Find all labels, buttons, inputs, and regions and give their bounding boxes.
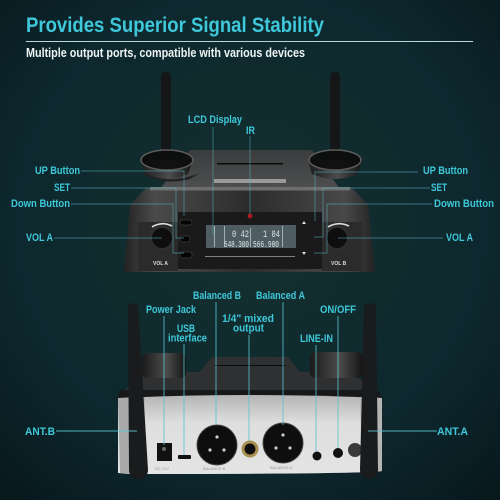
label: VOL A right: VOL A: [446, 232, 473, 244]
icon: right antenna: [330, 72, 340, 156]
device top: [118, 357, 382, 396]
USB port: [178, 455, 191, 459]
label: ANT.A: ANT.A: [437, 426, 468, 438]
LCD display: 0 42: [232, 230, 249, 241]
label: SET left: SET: [54, 182, 70, 194]
label: ANT.B: ANT.B: [25, 426, 55, 438]
label: Balanced B: Balanced B: [193, 290, 241, 302]
XLR connector A: [263, 423, 303, 463]
callout lines: top device: [54, 127, 443, 253]
left antenna: [128, 303, 148, 480]
top device: receiver front: [124, 72, 375, 272]
on/off switch: [333, 448, 343, 458]
power jack: [157, 443, 172, 461]
label: USB interface: [168, 323, 207, 344]
label: ON/OFF: ON/OFF: [320, 304, 356, 316]
label: Power Jack: Power Jack: [146, 304, 197, 316]
subtitle: Multiple output ports, compatible with various devices: [26, 46, 305, 60]
right knob panel: [322, 222, 362, 271]
callout lines: bottom device: [56, 302, 437, 455]
right button marks: [302, 221, 306, 255]
label: LINE-IN: LINE-IN: [300, 333, 333, 345]
port caption text: [155, 465, 293, 471]
front panel: [178, 212, 322, 269]
left cup: [142, 353, 186, 378]
side connector right: [348, 443, 362, 457]
label: IR: IR: [246, 125, 255, 137]
line-in port: [312, 452, 322, 460]
label: UP Button left: UP Button: [35, 165, 80, 177]
IR sensor: [248, 214, 252, 218]
port caption text: BALANCE B: [203, 466, 226, 471]
label: USB interface: interface: [168, 332, 207, 344]
label: 1/4 inch mixed output: 1/4" mixed: [222, 313, 274, 325]
label: UP Button right: UP Button: [423, 165, 468, 177]
left knob panel: VOL A: [153, 261, 168, 267]
LCD display: 566.900: [253, 240, 279, 250]
label: 1/4 inch mixed output: [222, 313, 274, 334]
right cup: [310, 352, 363, 378]
label: VOL A left: VOL A: [26, 232, 53, 244]
label: Balanced A: Balanced A: [256, 290, 305, 302]
LCD display: [206, 225, 296, 250]
left knob panel: [138, 222, 178, 271]
right antenna: [360, 303, 378, 479]
XLR connector B: [197, 425, 237, 465]
device body: [124, 188, 375, 272]
label: Down Button left: Down Button: [11, 198, 70, 210]
rear silver panel: [118, 395, 382, 474]
bottom device: receiver rear: [118, 303, 383, 480]
right knob panel: VOL B: [331, 261, 347, 267]
icon: left antenna: [161, 72, 171, 156]
label: SET right: SET: [431, 182, 447, 194]
LCD display: 548.300: [224, 240, 249, 250]
left buttons: [180, 220, 192, 258]
LCD display: 1 04: [263, 230, 280, 241]
port caption text: DC 12V: [155, 466, 169, 471]
port caption text: BALANCE A: [270, 465, 293, 470]
label: 1/4 inch mixed output: output: [233, 322, 264, 334]
label: LCD Display: LCD Display: [188, 114, 243, 126]
right cup: [308, 150, 362, 179]
left cup: [140, 150, 200, 182]
device top panel: [160, 150, 340, 189]
label: USB interface: USB: [177, 323, 195, 335]
title: Provides Superior Signal Stability: [26, 14, 324, 37]
1/4 inch jack: [242, 440, 258, 458]
